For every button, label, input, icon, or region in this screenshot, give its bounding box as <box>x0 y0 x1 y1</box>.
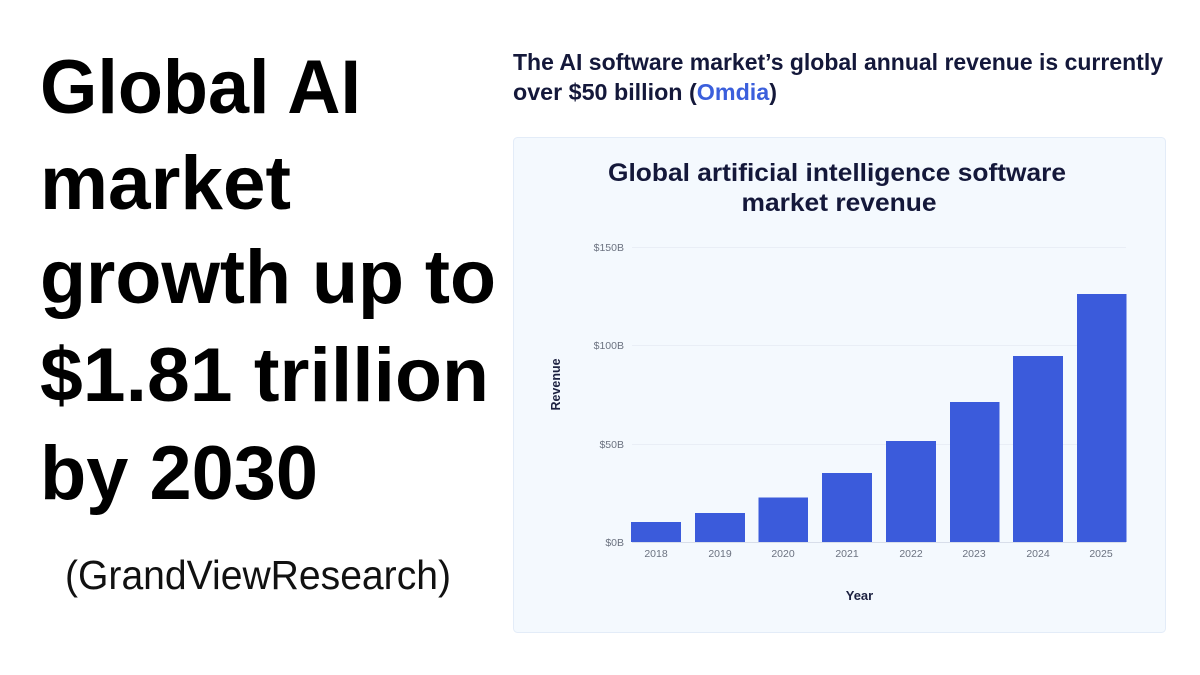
subheading <box>513 49 1163 105</box>
bar chart <box>631 294 1126 542</box>
y axis labels <box>594 242 624 549</box>
y axis labels: $50B <box>599 439 624 451</box>
chart title: market revenue <box>742 189 937 217</box>
y axis labels: $0B <box>605 537 624 549</box>
y axis labels: $150B <box>594 242 624 254</box>
y axis title: Revenue <box>549 358 563 411</box>
x axis labels: 2025 <box>1089 548 1113 560</box>
x axis labels <box>644 548 1113 560</box>
source credit: (GrandViewResearch) <box>65 552 451 598</box>
x axis labels: 2018 <box>644 548 668 560</box>
chart title <box>608 159 1066 217</box>
title: by 2030 <box>40 431 318 516</box>
x axis labels: 2022 <box>899 548 923 560</box>
title <box>40 45 496 516</box>
x axis labels: 2021 <box>835 548 859 560</box>
x axis labels: 2024 <box>1026 548 1050 560</box>
x axis labels: 2023 <box>962 548 986 560</box>
title: growth up to <box>40 235 496 320</box>
title: market <box>40 141 291 226</box>
title: $1.81 trillion <box>40 333 489 418</box>
title: Global AI <box>40 45 361 130</box>
chart title: Global artificial intelligence software <box>608 159 1066 187</box>
subheading: over $50 billion (Omdia) <box>513 79 777 105</box>
x axis labels: 2019 <box>708 548 732 560</box>
y axis labels: $100B <box>594 340 624 352</box>
subheading: The AI software market’s global annual revenue is currently <box>513 49 1163 75</box>
grid lines <box>632 248 1126 542</box>
panel: chart card <box>514 138 1166 632</box>
x axis labels: 2020 <box>771 548 795 560</box>
x axis title: Year <box>846 588 873 603</box>
